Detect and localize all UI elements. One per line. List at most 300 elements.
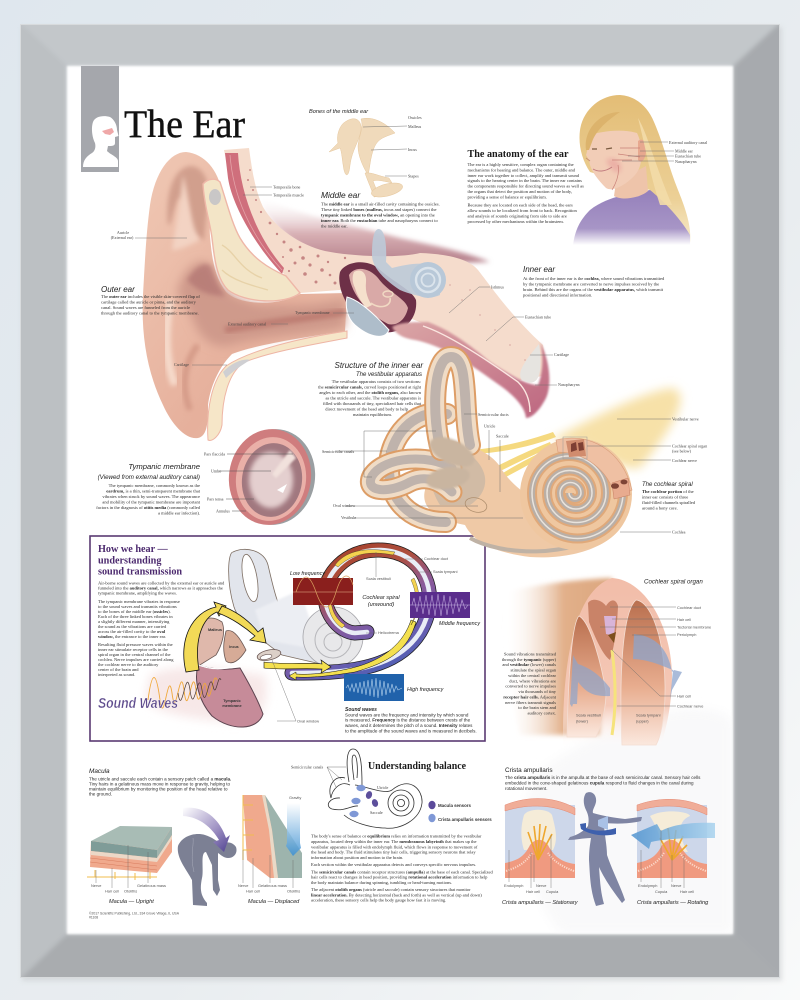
macula captions: Macula — Displaced [248, 899, 300, 905]
sound waves note [345, 707, 477, 733]
inner ear text: Inner ear [523, 265, 555, 274]
crista labels [504, 883, 694, 894]
balance body copy: The semicircular canals contain receptor structures (ampulla) at the base of each canal. Specialized [311, 869, 494, 874]
tympanic membrane text: a middle ear infection). [158, 510, 200, 516]
panel body copy: across the air-filled cavity to the oval [98, 629, 166, 634]
section heading: bones: Bones of the middle ear [309, 109, 369, 115]
panel body copy [98, 580, 225, 677]
balance body copy: the body maintain balance during spinning, tumbling or head-turning motions. [311, 880, 452, 886]
outer ear text: The outer ear includes the visible skin-covered flap of [101, 294, 200, 299]
ear labels: Cartilage [174, 362, 189, 367]
inner ear labels: Semicircular ducts [478, 412, 509, 417]
arrow: wave through cochlea [264, 660, 331, 673]
panel body copy: the cochlear nerve to the auditory [98, 662, 159, 667]
panel body copy: funneled into the auditory canal, which narrows as it approaches the [98, 586, 223, 590]
cochlear nerve [612, 650, 615, 735]
temporal muscle [225, 153, 284, 274]
macula labels: Otoliths [124, 888, 137, 894]
ear canal wash [145, 667, 267, 722]
spiral organ labels: Periolymph [677, 632, 696, 637]
cut cochlear coil [556, 438, 632, 496]
panel body copy: a slightly different manner, intensifying [98, 619, 170, 625]
macula labels: Hair cell [246, 888, 260, 894]
spiral organ leaders [600, 607, 676, 706]
ear labels: Eustachian tube [675, 154, 701, 158]
anatomy of the ear text: mechanisms for hearing and balance. The outer, middle and [468, 167, 576, 173]
sensors in diagram [349, 785, 379, 817]
balance body copy: acceleration, these sensory cells help the body gauge how fast it is moving. [311, 898, 446, 904]
macula text: maintain equilibrium by monitoring the position of the head relative to [89, 786, 228, 792]
nerve branches [463, 432, 556, 487]
cochlea part labels: Scala vestibuli [366, 576, 391, 581]
sound waves note: waves, and it determines the pitch of a sound. Intensity relates [345, 723, 473, 728]
anatomy of the ear text: inner ear work together to collect, amplify and transmit sound [468, 173, 580, 179]
spiral organ labels: (upper) [636, 718, 649, 724]
balance body copy [311, 834, 494, 904]
spiral organ text: receptor hair cells. Adjacent [503, 694, 557, 699]
balance body copy: apparatus, located deep within the inner ear. The membranous labyrinth that makes up the [311, 839, 477, 845]
cochlea part labels: Scala tympani [433, 569, 458, 574]
structure of inner ear text: direct movement of the head and body to help [325, 406, 409, 412]
balance legend [428, 801, 492, 822]
tympanic membrane diagram [197, 665, 263, 727]
ear labels: External auditory canal [669, 140, 708, 145]
outer ear text [101, 285, 200, 316]
spiral organ text: nerve fibers transmit signals [505, 700, 556, 705]
panel body copy: inner ear stimulate receptor cells in the [98, 647, 168, 652]
text labels and copy [89, 109, 711, 920]
inner ear text: brain. Behind this are the organs of the vestibular apparatus, which transmit [523, 287, 664, 292]
inner ear (blue-grey structures) [372, 229, 440, 297]
inner ear labels: Semicircular canals [322, 449, 355, 454]
bones labels [408, 115, 422, 178]
concha shadow [177, 262, 345, 346]
rotation band around waist [580, 823, 616, 835]
macula captions [109, 899, 300, 905]
anatomy of the ear text: and analysis of sounds originating from side to side are [468, 214, 567, 218]
low frequency box [293, 576, 353, 607]
balance body copy: The body's sense of balance or equilibrium relies on information transmitted by the vestibular [311, 834, 482, 838]
how we hear panel: Malleus [208, 628, 222, 632]
structure of inner ear text: the semicircular canals, curved loops positioned at right [318, 384, 422, 390]
structure of inner ear text: The vestibular apparatus [356, 372, 422, 378]
flow arrows [633, 634, 682, 700]
ear leader lines [135, 187, 557, 385]
helix fold shadow [167, 166, 209, 240]
frequency labels: Middle frequency [439, 621, 480, 627]
spiral organ labels: Cochlear nerve [677, 704, 703, 708]
cochlea part labels: Helicotrema [378, 630, 400, 635]
inner ear labels: Saccule [496, 434, 509, 438]
inner ear labels: Cochlea [672, 530, 686, 534]
anatomy of the ear text: allow sounds to be localized from front to back. Recognition [468, 208, 577, 213]
structure of inner ear text: as the utricle and saccule. The vestibular apparatus is [325, 396, 421, 400]
crista text: The crista ampullaris is in the ampulla at the base of each semicircular canal. Sensory hair cells [505, 775, 701, 780]
sound waves note: to the amplitude of the sound waves and is measured in decibels. [345, 728, 477, 733]
crista labels: Cupula [546, 889, 559, 894]
cochlea part labels: Cochlear duct [424, 556, 449, 561]
middle ear text [321, 190, 440, 228]
anatomy of the ear text: signals to the hearing center in the brain. The inner ear contains [468, 178, 582, 183]
crista text: rotational movement. [505, 786, 547, 791]
ear labels [111, 140, 708, 387]
inner ear labels: Utricle [484, 424, 496, 428]
crista captions [502, 900, 709, 906]
anatomy of the ear text: The ear is a highly sensitive, complex organ containing the [468, 162, 574, 168]
girl portrait [573, 95, 690, 245]
tympanic membrane text: Tympanic membrane [128, 462, 200, 471]
ear labels: Auricle [117, 230, 129, 235]
scala vestibuli [567, 616, 606, 737]
lower cartilage band [208, 331, 347, 440]
spiral organ text: Cochlear spiral organ [644, 578, 703, 586]
panel body copy: interpreted as sound. [98, 672, 135, 677]
balance body copy: vestibular apparatus is filled with endolymph fluid, which flows in response to movement of [311, 844, 478, 850]
ossicle bones illustration [329, 118, 407, 200]
panel body copy: tympanic membrane, amplifying the waves. [98, 590, 177, 596]
spiral organ text: to the brain stem and [518, 705, 557, 710]
spiral organ labels [576, 605, 711, 724]
spiral organ labels: (lower) [576, 718, 589, 724]
tympanic labels: Pars flaccida [204, 452, 225, 456]
middle ear text: Middle ear [321, 190, 361, 200]
copyright: ©2017 Scientific Publishing, Ltd., 334 Grove Village, IL USA [89, 912, 180, 916]
balance body copy: the head and body. The fluid stimulates tiny hair cells, triggering sensory neurons that relay [311, 850, 476, 856]
displaced leaders [243, 850, 293, 888]
balance body copy: hair cells react to changes in head position, providing rotational acceleration information to help [311, 875, 488, 881]
how we hear panel: membrane [222, 704, 242, 708]
cochlear spiral text: The cochlear portion of the [642, 489, 694, 494]
ear labels: (External ear) [111, 235, 134, 240]
cochlear spiral text: The cochlear spiral [642, 482, 693, 488]
outer ear text: cartilage called the auricle or pinna, and the auditory [101, 300, 197, 306]
frequency labels: High frequency [407, 687, 444, 693]
inner ear text: At the front of the inner ear is the cochlea, where sound vibrations transmitted [523, 276, 665, 281]
tympanic membrane illustration [219, 424, 321, 530]
arrow: rotation [631, 823, 715, 849]
sound wave traces [148, 678, 217, 708]
ear labels: Eustachian tube [525, 314, 551, 320]
tympanic membrane text: and mobility of the tympanic membrane are important [102, 500, 201, 504]
spiral organ text [502, 578, 703, 716]
semicircular canals [370, 357, 470, 522]
spiral organ text: duct, where vibrations are [509, 678, 556, 684]
macula text: the ground. [89, 792, 112, 796]
high frequency box [344, 674, 404, 701]
spiral organ text: and vestibular (lower) canals [502, 662, 556, 667]
panel heading: How we hear — [98, 544, 169, 555]
sound waves note: Sound waves [345, 707, 377, 713]
panel body copy: Resulting fluid pressure waves within the [98, 642, 173, 647]
spiral organ text: Sound vibrations transmitted [504, 652, 557, 656]
panel body copy: Each of the three linked bones vibrates in [98, 614, 173, 619]
spinning figure [568, 792, 642, 906]
spiral organ labels: Hair cell [677, 617, 691, 622]
panel body copy: The tympanic membrane vibrates in response [98, 599, 180, 604]
macula captions: Macula — Upright [109, 899, 154, 905]
crista labels: Hair cell [680, 889, 694, 894]
small cochlea [303, 607, 363, 667]
anatomy of the ear text: processed by other mechanisms within the brainstem. [468, 219, 564, 224]
spiral organ text: converted to nerve impulses [505, 684, 556, 689]
spiral organ text: via thousands of tiny [518, 689, 557, 694]
panel body copy: Air-borne sound waves are collected by the external ear or auricle and [98, 580, 225, 586]
crista labels: Endolymph [638, 883, 657, 888]
bone leaders [363, 126, 407, 176]
tympanic membrane text: The tympanic membrane, commonly known as the [109, 483, 200, 489]
spiral organ labels: Scala tympani [636, 712, 661, 718]
macula labels [91, 795, 301, 894]
bones labels: Ossicles [408, 115, 422, 120]
cochlear spiral text: fluid-filled channels spiralled [642, 500, 696, 505]
balance body copy: Each section within the vestibular apparatus detects and conveys specific nervous impulses. [311, 862, 476, 867]
macula labels: Gelatinous mass [258, 883, 287, 888]
sound waves note: is measured. Frequency is the distance between crests of the [345, 718, 471, 722]
cochlear spiral text: around a bony core. [642, 506, 678, 510]
tympanic labels [204, 452, 230, 514]
structure of inner ear text: Structure of the inner ear [334, 361, 423, 370]
crista labels: Cupula [655, 889, 668, 894]
anatomy of the ear text: The anatomy of the ear [468, 149, 569, 160]
panel body copy: window, the entrance to the inner ear. [98, 634, 166, 639]
tympanic membrane text: (Viewed from external auditory canal) [98, 474, 200, 481]
inner ear text: by the tympanic membrane are converted to nerve impulses received by the [523, 282, 659, 286]
macula labels: Nerve [91, 883, 101, 888]
crista captions: Crista ampullaris — Rotating [637, 900, 709, 906]
how we hear panel: Incus [229, 645, 239, 649]
ear labels: Cartilage [554, 352, 569, 357]
arrow: gravity [286, 803, 301, 856]
crista labels: Hair cell [526, 889, 540, 894]
crista captions: Crista ampullaris — Stationary [502, 900, 579, 906]
macula labels: Nerve [238, 883, 248, 888]
inner ear labels: Cochlear spiral organ [672, 444, 707, 448]
title tab with head icon [81, 66, 119, 172]
bending figure [178, 808, 237, 906]
anatomy of the ear text: the components responsible for directing sound waves as well as [468, 184, 584, 189]
cochlea part labels: Oval window [297, 718, 319, 724]
macula text: Macula [89, 768, 110, 775]
balance body copy: information about position and motion to the brain. [311, 855, 403, 860]
tube wall [504, 578, 612, 735]
spiral organ labels: Tectorial membrane [677, 624, 711, 630]
panel heading: understanding [98, 556, 161, 566]
sound waves note: Sound waves are the frequency and intensity by which sound [345, 712, 469, 718]
ear labels: Middle ear [675, 148, 693, 154]
middle ear text: The middle ear is a small air-filled cavity containing the ossicles. [321, 202, 440, 206]
balance legend: Crista ampullaris sensors [438, 817, 492, 822]
cochlear spiral text [642, 482, 696, 510]
panel heading [98, 544, 182, 578]
macula leaders [96, 845, 148, 888]
bones labels: Incus [408, 147, 417, 152]
ossicles [353, 270, 372, 308]
cochlear spiral text: inner ear consists of three [642, 494, 688, 500]
macula labels: Hair cell [105, 888, 119, 894]
cochlea part labels [272, 552, 458, 724]
crista text: Crista ampullaris [505, 767, 553, 774]
inner ear labels: (see below) [672, 448, 692, 454]
anatomy of the ear text [468, 149, 584, 224]
anatomy of the ear text: the organs that detect the position and motion of the body, [468, 189, 572, 195]
crista text: embedded in the cone-shaped gelatinous cupula respond to fluid changes in the canal during [505, 780, 694, 786]
eardrum in section [346, 297, 389, 336]
inner ear structure illustration [335, 357, 681, 557]
tympanic membrane text [96, 462, 201, 516]
panel body copy: to the bones of the middle ear (ossicles). [98, 609, 171, 614]
macula labels: Gelatinous mass [137, 883, 166, 888]
middle frequency box [410, 592, 470, 618]
macula text: Tiny hairs in a gelatinous mass move in response to gravity, helping to [89, 782, 230, 786]
crista labels: Nerve [671, 883, 681, 888]
ear labels: Nasopharynx [558, 382, 580, 387]
macula text [89, 768, 231, 796]
anatomy of the ear text: Because they are located on each side of the head, the ears [468, 202, 573, 208]
arrow: head tilt [183, 808, 230, 852]
face [586, 131, 642, 189]
ear labels: Temporalis bone [273, 184, 301, 190]
cochlear duct [588, 600, 618, 660]
ear labels: Tympanic membrane [295, 310, 330, 315]
outer ear text: canal. Sound waves are funneled from the auricle [101, 305, 190, 310]
structure of inner ear text [318, 361, 423, 417]
ear labels: Temporalis muscle [273, 192, 304, 198]
membrane leaders [219, 454, 293, 511]
middle ear ossicles [195, 618, 224, 668]
structure of inner ear text: angles to each other, and the otolith organs, also known [319, 390, 422, 396]
section dome [563, 578, 672, 748]
anatomy of the ear text: providing a sense of balance or equilibrium. [468, 194, 547, 199]
outer ear text: through the auditory canal to the tympanic membrane. [101, 310, 199, 316]
scala tympani [621, 600, 665, 745]
balance body copy: linear acceleration. By detecting horizontal (back and forth) as well as vertical (up and down) [311, 892, 482, 897]
inner ear labels: Vestibule [341, 515, 356, 520]
inner ear labels: Cochlear nerve [672, 458, 697, 463]
crista leaders [509, 835, 551, 888]
structure of inner ear text: maintain equilibrium. [353, 412, 392, 417]
canal and vestibule sketch [229, 549, 325, 665]
crista labels: Nerve [536, 883, 546, 888]
ear labels: External auditory canal [228, 322, 267, 326]
shirt [573, 190, 690, 245]
how we hear panel: Tympanic [223, 699, 241, 703]
macula displaced block [243, 795, 302, 888]
girl leader lines [622, 142, 674, 161]
ampullae bulges [425, 431, 479, 473]
arrow: sound pressure through ossicles [184, 602, 226, 672]
macula labels: Otoliths [287, 888, 300, 894]
ear labels: Nasopharynx [675, 159, 697, 164]
panel body copy: the sound as the vibrations are carried [98, 624, 167, 629]
cochlea spiral [520, 438, 632, 550]
middle ear text: tympanic membrane to the oval window, an opening into the [321, 212, 435, 218]
title: The Ear [124, 103, 245, 146]
tympanic membrane text: vibrates when struck by sound waves. The appearance [102, 494, 200, 499]
mauve membrane band above bone [262, 196, 490, 264]
macula upright block [87, 826, 172, 888]
middle ear text: the middle ear. [321, 224, 348, 228]
anatomical ear illustration [135, 148, 557, 440]
inner ear labels: Vestibular nerve [672, 416, 699, 422]
spiral organ text: auditory cortex. [528, 710, 556, 716]
bones labels: Stapes [408, 174, 419, 178]
inner ear text [523, 265, 665, 298]
vestibule and cochlear base [424, 440, 625, 557]
cochlear spiral organ illustration [504, 578, 682, 748]
crista labels: Endolymph [504, 883, 523, 888]
tympanic labels: Pars tensa [207, 496, 224, 502]
balance diagram labels: Saccule [370, 810, 383, 815]
panel body copy: spiral organ in the central channel of the [98, 652, 171, 657]
frequency labels: (unwound) [368, 602, 394, 608]
vestibular line diagram [328, 749, 422, 828]
inner ear text: positional and directional information. [523, 292, 592, 298]
temporal bone [224, 148, 548, 380]
spiral organ labels: Scala vestibuli [576, 712, 601, 718]
hair front strand [586, 112, 620, 150]
sound waves label: Sound Waves [98, 696, 178, 712]
ear and inner anatomy sketch [638, 140, 646, 162]
balance diagram labels: Semicircular canals [291, 764, 324, 770]
white poster sheet [67, 66, 733, 934]
copyright [89, 912, 180, 920]
panel heading: sound transmission [98, 566, 182, 578]
unwound cochlea [292, 550, 430, 673]
middle ear cavity [339, 262, 416, 332]
middle ear text: inner ear. Both the eustachian tube and nasopharynx connect to [321, 218, 439, 223]
inner ear labels [322, 412, 707, 534]
spiral organ text: stimulate the spiral organ [510, 668, 557, 673]
frequency labels: Cochlear spiral [362, 595, 400, 601]
understanding balance heading: Understanding balance [368, 761, 466, 772]
panel body copy: center of the brain and [98, 667, 139, 672]
nerve fan [550, 388, 681, 468]
how we hear panel [90, 536, 485, 741]
hair back [579, 95, 690, 243]
middle ear text: These tiny linked bones (malleus, incus and stapes) connect the [321, 207, 437, 212]
panel body copy: cochlea. Nerve impulses are carried along [98, 657, 174, 662]
balance body copy: The adjacent otolith organs (utricle and saccule) contain sensory structures that monitor [311, 887, 471, 892]
icon: head silhouette [83, 116, 118, 167]
crista text [505, 767, 701, 791]
copyright: #1108 [89, 916, 98, 920]
spiral organ text: through the tympanic (upper) [502, 657, 556, 662]
frequency labels: Low frequency [290, 571, 325, 577]
auricular cartilage [203, 179, 300, 301]
structure of inner ear text: filled with thousands of tiny, specialized hair cells that [323, 401, 422, 407]
spiral organ labels: Cochlear duct [677, 605, 702, 610]
tympanic labels: Annulus [216, 508, 230, 514]
macula labels: Gravity [289, 795, 301, 800]
auricle skin [143, 152, 347, 438]
neck [614, 166, 648, 198]
balance diagram labels [291, 764, 389, 815]
inner ear labels: Oval window [333, 503, 355, 508]
inner ear leaders [335, 414, 671, 532]
ear labels: Isthmus [491, 284, 504, 290]
macula text: The utricle and saccule each contain a sensory patch called a macula. [89, 776, 231, 782]
eustachian tube [392, 322, 549, 418]
balance diagram labels: Utricle [377, 785, 389, 790]
outer ear text: Outer ear [101, 285, 135, 294]
spiral organ text: within the central cochlear [508, 673, 556, 678]
spiral organ labels: Hair cell [677, 694, 691, 698]
bones labels: Malleus [408, 124, 422, 129]
tympanic membrane text: factors in the diagnosis of otitis media (commonly called [96, 505, 201, 510]
frequency labels [290, 571, 480, 693]
tympanic membrane text: eardrum, is a thin, semi-transparent membrane that [106, 488, 201, 494]
crista stationary block [505, 799, 575, 888]
